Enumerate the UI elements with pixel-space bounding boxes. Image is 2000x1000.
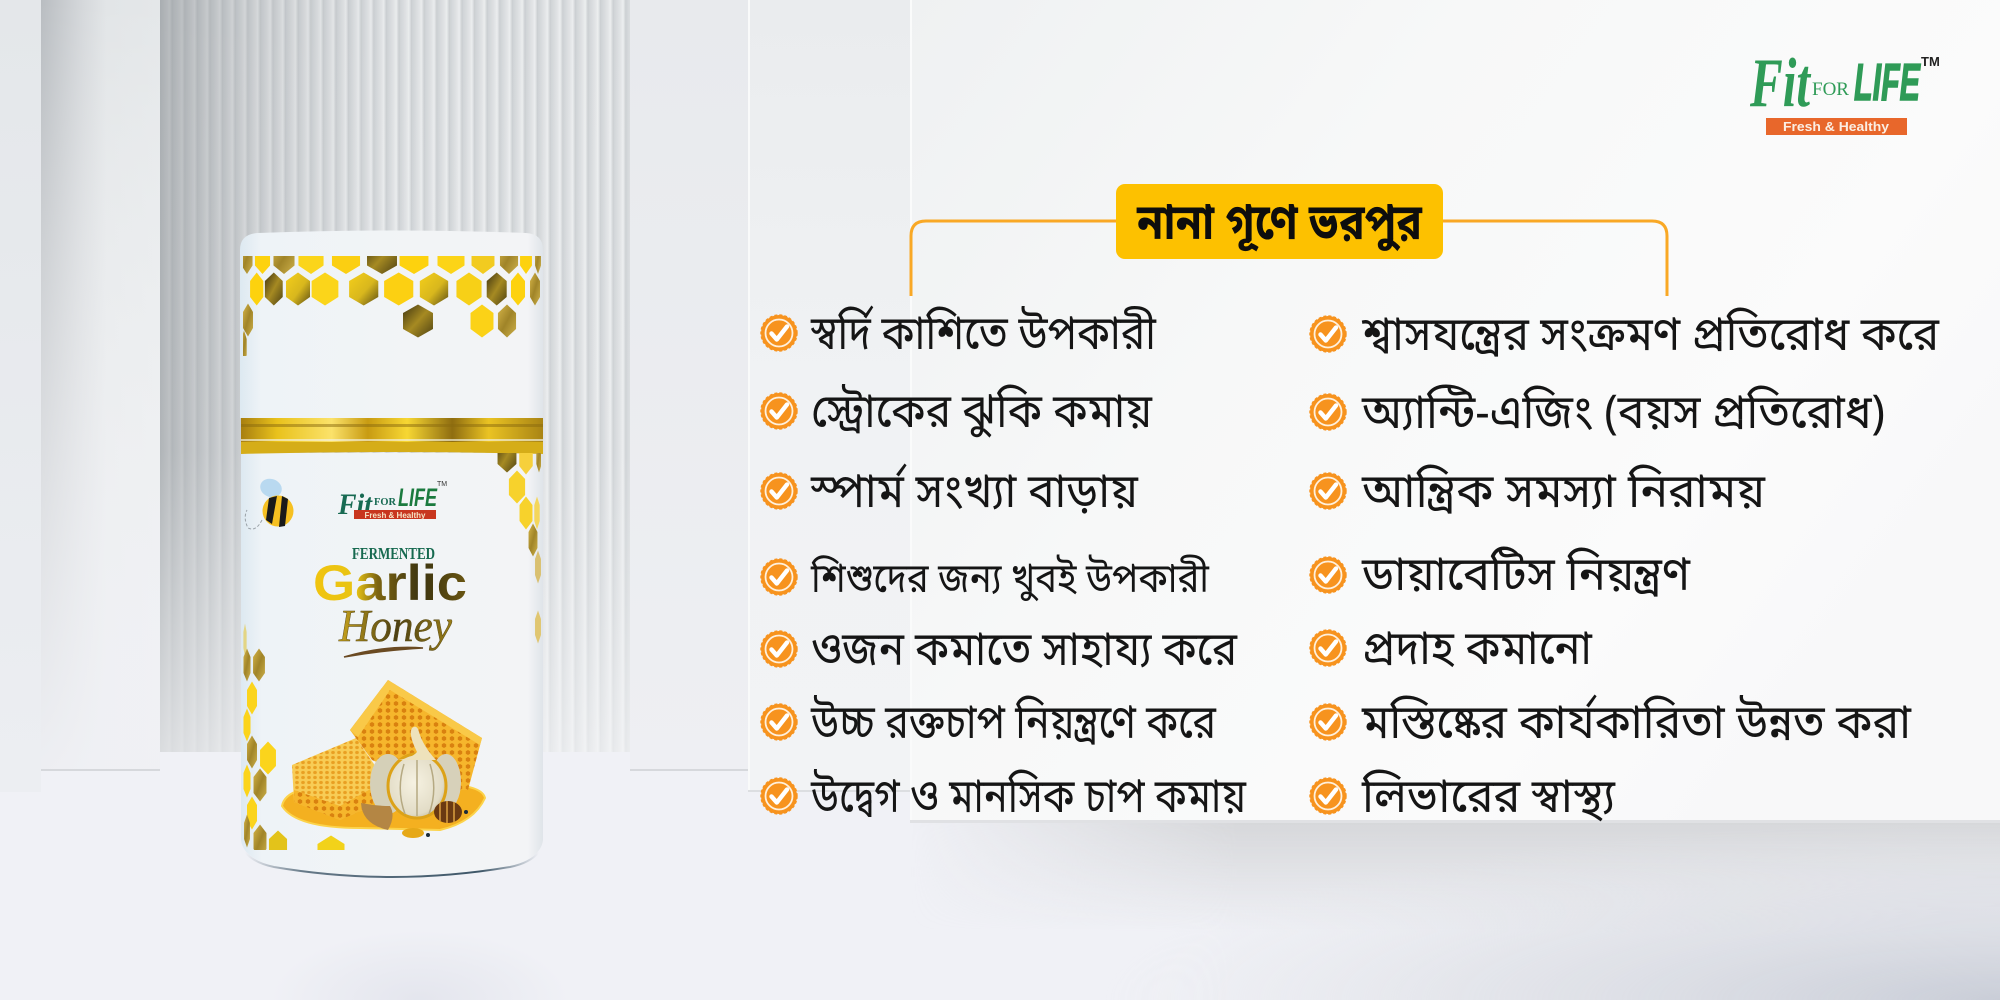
jar logo: Fit [337,488,374,521]
heading bracket [911,221,1667,296]
benefit: intestinal: আন্ত্রিক সমস্যা নিরাময় [1361,464,1766,527]
benefit: respiratory: শ্বাসযন্ত্রের সংক্রমণ প্রতিরোধ করে [1361,307,1940,370]
floor right shade [910,822,2000,1000]
jar title: garlic: Garlic [313,555,467,611]
benefit: stroke risk: স্ট্রোকের ঝুকি কমায় [811,384,1153,447]
logo word: FOR: FOR [1812,79,1849,100]
gold band [241,418,543,454]
honey dipper [434,801,462,823]
benefit: anxiety: উদ্বেগ ও মানসিক চাপ কমায় [810,769,1246,832]
benefit: inflammation: প্রদাহ কমানো [1362,622,1592,684]
honey drop [402,810,468,838]
benefit: sperm count: স্পার্ম সংখ্যা বাড়ায় [810,464,1139,527]
floor reflection [270,860,570,1000]
jar title: honey: Honey [338,600,453,651]
upper honeycomb [350,680,482,790]
benefit: diabetes: ডায়াবেটিস নিয়ন্ত্রণ [1361,547,1691,610]
logo tagline bar [1766,118,1907,135]
jar base shadow [245,852,539,877]
ribbed wall [160,0,630,752]
lower honeycomb [292,738,378,820]
benefit: weight loss: ওজন কমাতে সাহায্য করে [811,623,1238,685]
illustration: honeycomb and garlic [282,680,485,838]
logo word: LIFE: LIFE [1854,54,1921,112]
wall panel centre [630,0,748,771]
benefit: anti-aging: অ্যান্টি-এজিং (বয়স প্রতিরোধ) [1361,385,1885,448]
benefit: brain: মস্তিষ্কের কার্যকারিতা উন্নত করা [1361,695,1911,758]
jar logo: Fresh & Healthy [365,511,426,520]
garlic cloves [370,754,461,814]
product jar [240,230,543,877]
jar logo: LIFE [398,484,438,512]
glass panel one [748,0,910,792]
garlic bulb [388,727,446,818]
body honeycomb [243,440,542,868]
benefit: blood pressure: উচ্চ রক্তচাপ নিয়ন্ত্রণে করে [810,695,1217,758]
jar title: fermented: FERMENTED [352,544,435,563]
benefit: cold and cough: স্বর্দি কাশিতে উপকারী [810,306,1156,369]
icon: bee [245,476,294,529]
wall strip left [0,0,41,792]
benefits list right column [1310,307,1940,832]
jar logo: FOR [374,497,397,508]
heading: নানা গূণে ভরপুর [1136,194,1423,260]
benefit: children: শিশুদের জন্য খুবই উপকারী [810,554,1210,609]
logo: Fit For Life [1749,45,1940,135]
logo tagline: Fresh & Healthy [1783,119,1890,134]
benefit: liver: লিভারের স্বাস্থ্য [1361,770,1616,832]
logo trademark: TM [1921,54,1940,69]
jar lid [240,230,543,418]
logo word: Fit: Fit [1749,45,1812,122]
lid honeycomb [243,256,541,356]
benefits list left column [761,306,1246,832]
small clove [361,803,393,830]
jar logo: TM [437,481,447,488]
honey puddle [282,785,485,830]
jar body [241,453,543,876]
jar logo [337,481,447,521]
wall panel left [41,0,160,771]
glass panel two [910,0,2000,822]
